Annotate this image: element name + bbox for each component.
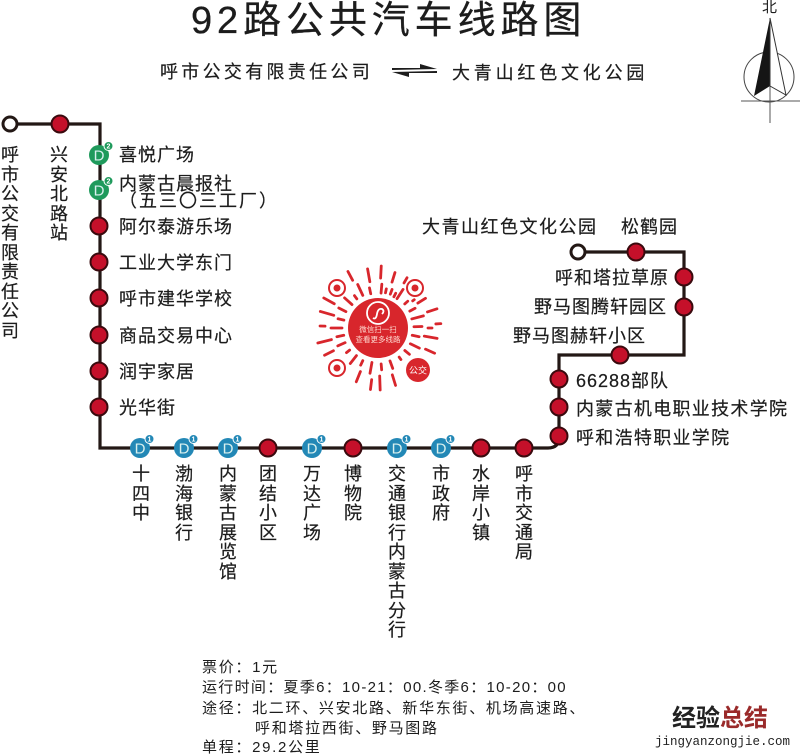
labels: south side vertical stops: 十四中 [132,464,150,523]
QR centre disc [348,298,408,358]
labels: east side stops [422,217,788,448]
labels: east side stops: 呼和浩特职业学院 [576,428,730,448]
route information [202,659,586,755]
labels: left vertical stops [1,145,68,341]
labels: west side stops: 光华街 [119,398,176,418]
QR mini-program code [318,266,441,390]
QR bus badge: 公交 [409,364,427,376]
labels: west side stops: 内蒙古晨报社 [119,174,233,194]
labels: west side stops: 工业大学东门 [119,253,233,273]
stops: blue metro line 1 interchange: 1 [236,436,240,444]
stops: blue metro line 1 interchange: 1 [320,436,324,444]
labels: east side stops: 呼和塔拉草原 [555,268,669,288]
labels: west side stops [119,145,279,418]
stops: blue metro line 1 interchange: 1 [192,436,196,444]
stops: blue metro line 1 interchange: D [436,440,447,458]
labels: south side vertical stops: 万达广场 [303,464,321,543]
labels: south side vertical stops: 博物院 [344,464,362,523]
labels: left vertical stops: 呼市公交有限责任公司 [1,145,19,341]
labels: west side stops: 润宇家居 [119,362,195,382]
labels: west side stops: 阿尔泰游乐场 [119,217,233,237]
stops: blue metro line 1 interchange: D [392,440,403,458]
labels: west side stops: 商品交易中心 [119,326,233,346]
subtitle: route terminals [160,62,648,83]
stops: blue metro line 1 interchange: 1 [449,436,453,444]
icon: bidirectional arrows [392,64,437,77]
labels: south side vertical stops: 渤海银行 [175,464,193,543]
stops: red stations [52,116,692,456]
labels: east side stops: 内蒙古机电职业技术学院 [576,399,788,419]
route information: 呼和塔拉西街、野马图路 [255,720,439,737]
subtitle: route terminals: 大青山红色文化公园 [452,63,648,83]
subtitle: route terminals: 呼市公交有限责任公司 [160,62,373,82]
stops: green metro line 2 interchange: 2 [107,144,111,150]
labels: south side vertical stops: 内蒙古展览馆 [219,464,237,582]
labels: east side stops: 大青山红色文化公园 [422,217,598,237]
labels: east side stops: 松鹤园 [621,217,678,237]
labels: left vertical stops: 兴安北路站 [50,145,68,243]
title: 92路公共汽车线路图 [191,0,586,42]
labels: west side stops: 呼市建华学校 [119,289,233,309]
stops: blue metro line 1 interchange: D [179,440,190,458]
labels: east side stops: 野马图腾轩园区 [534,297,667,317]
icon: north compass [741,0,800,123]
watermark [655,704,790,749]
stops: green metro line 2 interchange: D [94,148,105,164]
route information: 运行时间：夏季6：10-21：00.冬季6：10-20：00 [202,679,567,696]
route information: 票价：1元 [202,659,279,676]
labels: south side vertical stops: 团结小区 [259,464,277,543]
stops: blue metro line 1 interchange: 1 [148,436,152,444]
labels: south side vertical stops: 水岸小镇 [472,464,490,543]
labels: south side vertical stops: 市政府 [432,464,450,523]
stops: blue metro line 1 interchange: D [307,440,318,458]
labels: south side vertical stops: 呼市交通局 [515,464,533,562]
labels: south side vertical stops [132,464,533,640]
labels: west side stops: （五三〇三工厂） [119,191,279,211]
QR finder rings [329,280,423,376]
labels: east side stops: 66288部队 [576,371,669,391]
stops: blue metro line 1 interchange: D [135,440,146,458]
labels: south side vertical stops: 交通银行内蒙古分行 [388,464,406,640]
watermark: 经验总结 [672,704,768,732]
QR caption: 查看更多线路 [356,334,401,344]
stops: green metro line 2 interchange: D [94,182,105,200]
stops: green metro line 2 interchange [89,142,113,200]
stops: blue metro line 1 interchange: D [223,440,234,458]
QR caption [356,324,401,344]
route information: 途径：北二环、兴安北路、新华东街、机场高速路、 [202,700,586,717]
end terminal [571,245,585,259]
QR logo ring [367,302,389,324]
stops: blue metro line 1 interchange: 1 [405,436,409,444]
stops: blue metro line 1 interchange [130,434,455,458]
labels: east side stops: 野马图赫轩小区 [513,326,646,346]
QR caption: 微信扫一扫 [359,324,397,334]
start terminal [3,117,17,131]
labels: west side stops: 喜悦广场 [119,145,195,165]
stops: green metro line 2 interchange: 2 [107,178,111,186]
route line [10,124,684,448]
watermark: jingyanzongjie.com [655,735,790,749]
